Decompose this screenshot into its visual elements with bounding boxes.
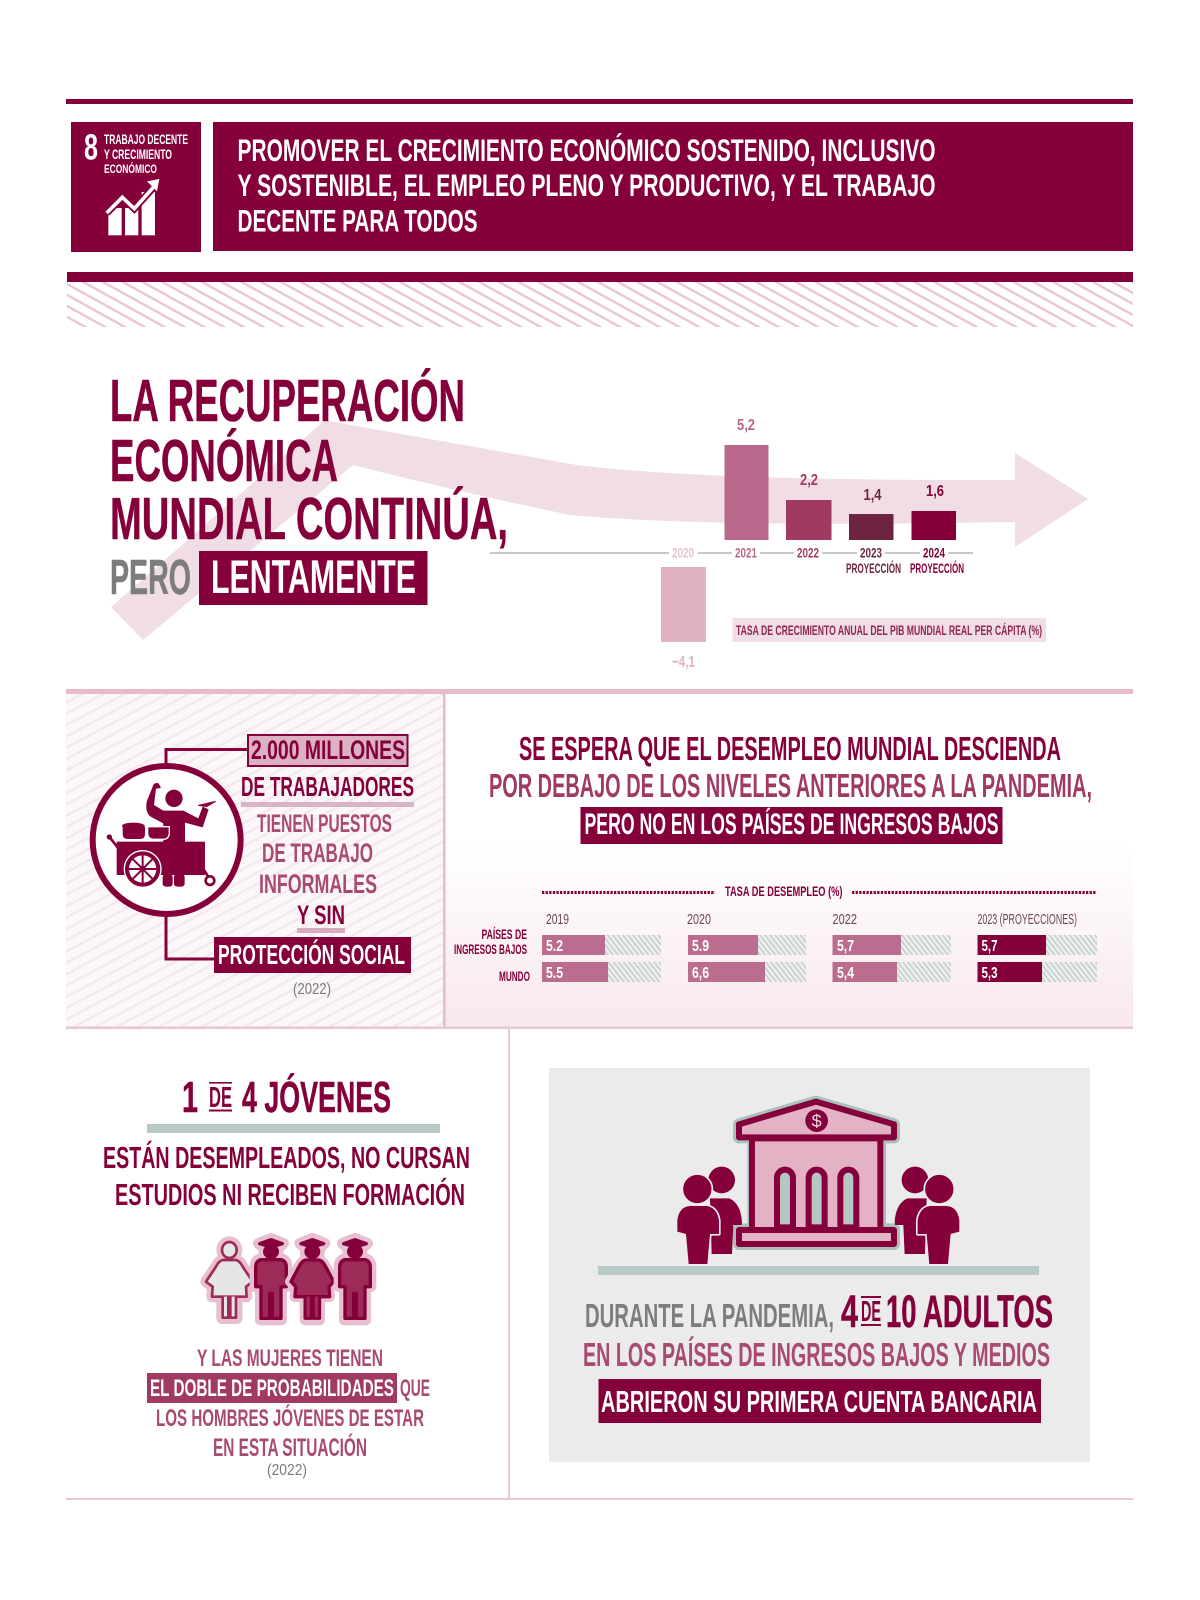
bar group 2023 projections: 5,7 [982, 938, 998, 955]
text: informal jobs: INFORMALES [259, 869, 377, 899]
badge number: 8 [84, 126, 98, 168]
chart caption [732, 618, 1046, 642]
SDG 8 badge [71, 122, 201, 252]
row labels: PAÍSES DE [482, 926, 527, 942]
bar group 2019: 5.2 [546, 938, 563, 955]
stat: 4 de 10 adultos: DURANTE LA PANDEMIA, [585, 1297, 834, 1334]
year note: (2022) [293, 981, 331, 998]
bar 2020: 2020 [672, 546, 694, 560]
bar 2023 [846, 487, 901, 576]
text: informal jobs: DE TRABAJO [262, 838, 373, 868]
text: y sin [297, 900, 345, 933]
bar 2024: 2024 [923, 546, 945, 560]
section rule [66, 689, 1133, 694]
stat: 4 de 10 adultos: DE [861, 1296, 881, 1328]
bar 2022 [786, 472, 832, 560]
bar group 2020: 5.9 [692, 938, 709, 955]
icon: dollar coin: $ [812, 1111, 822, 1131]
bar group 2023 projections [978, 911, 1097, 982]
section rule [66, 1026, 1133, 1029]
goal statement [238, 132, 936, 238]
highlight: el doble de probabilidades: EL DOBLE DE PROBABILIDADES [150, 1375, 394, 1402]
main heading [110, 368, 508, 605]
bar 2020 [661, 546, 706, 671]
highlight: low-income countries [580, 807, 1002, 844]
bar group 2022: 5,4 [837, 965, 854, 982]
bar group 2019 [542, 911, 661, 982]
row labels [454, 926, 530, 984]
goal banner [213, 122, 1133, 251]
figure: man [339, 1238, 371, 1320]
highlight: primera cuenta bancaria [598, 1379, 1041, 1423]
bar group 2022 [832, 911, 951, 982]
chart caption: TASA DE CRECIMIENTO ANUAL DEL PIB MUNDIAL REAL PER CÁPITA (%) [736, 623, 1042, 638]
main heading: MUNDIAL CONTINÚA, [110, 486, 508, 552]
divider bar [147, 1124, 440, 1133]
badge title: TRABAJO DECENTE [104, 131, 188, 147]
top rule [66, 99, 1133, 104]
bar 2023: 1,4 [864, 487, 882, 504]
text: women more likely: QUE [400, 1375, 430, 1402]
bar 2021: 5,2 [737, 417, 755, 434]
bar group 2023 projections: 2023 (PROYECCIONES) [978, 911, 1077, 928]
icon: four young people [206, 1238, 371, 1320]
arrow: recovery trend [111, 420, 1088, 640]
bar 2022: 2,2 [800, 472, 818, 489]
text: women more likely: Y LAS MUJERES TIENEN [197, 1345, 383, 1372]
panel: informal workers [66, 694, 446, 1027]
text: women more likely [147, 1345, 430, 1462]
stat: 1 de 4 jóvenes: 4 JÓVENES [242, 1072, 391, 1122]
bar 2024: PROYECCIÓN [910, 561, 964, 576]
text: unemployed [103, 1140, 470, 1212]
icon: bank with people [677, 1102, 959, 1264]
highlight: lentamente [199, 550, 428, 605]
icon: dollar coin [805, 1109, 828, 1132]
bar group 2020: 2020 [687, 911, 711, 928]
icon: street vendor in circle [93, 766, 241, 914]
stat: 1 de 4 jóvenes: DE [209, 1082, 232, 1114]
text: y sin: Y SIN [297, 900, 345, 930]
text: informal jobs [257, 810, 392, 899]
stat: 4 de 10 adultos: 4 [841, 1286, 858, 1337]
bar 2021: 2021 [735, 546, 757, 560]
text: de trabajadores: DE TRABAJADORES [241, 771, 414, 802]
highlight: el doble de probabilidades [147, 1373, 397, 1403]
highlight: lentamente: LENTAMENTE [211, 550, 416, 603]
people right [895, 1167, 959, 1264]
stat: 1 de 4 jóvenes: 1 [182, 1073, 198, 1122]
panel: unemployment [446, 694, 1133, 1027]
bar 2020: −4,1 [672, 654, 695, 671]
bar 2023: 2023 [860, 546, 882, 560]
bar 2024: 1,6 [926, 483, 944, 500]
bar 2021 [724, 417, 768, 560]
bar group 2020 [687, 911, 806, 982]
main heading: LA RECUPERACIÓN [110, 368, 465, 434]
badge title: Y CRECIMIENTO [104, 146, 172, 162]
panel: first bank account [549, 1068, 1090, 1462]
row labels: INGRESOS BAJOS [454, 941, 527, 957]
badge title [104, 131, 188, 176]
chart title: TASA DE DESEMPLEO (%) [725, 883, 842, 899]
main heading: PERO [110, 551, 191, 605]
bar group 2020: 6,6 [692, 965, 709, 982]
text: unemployed: ESTÁN DESEMPLEADOS, NO CURSAN [103, 1140, 470, 1175]
goal statement: DECENTE PARA TODOS [238, 202, 478, 238]
bar group 2019: 2019 [546, 911, 569, 928]
people left [677, 1167, 742, 1264]
bar 2024 [910, 483, 964, 576]
stat: 4 de 10 adultos [585, 1286, 1053, 1337]
text: unemployed: ESTUDIOS NI RECIBEN FORMACIÓN [115, 1176, 465, 1212]
stat: 2.000 millones: 2.000 MILLONES [251, 735, 405, 765]
bar group 2022: 2022 [832, 911, 857, 928]
text: de trabajadores [241, 771, 414, 807]
figure: woman [290, 1238, 334, 1320]
text: informal jobs: TIENEN PUESTOS [257, 810, 392, 838]
bar 2022: 2022 [797, 546, 819, 560]
panel heading [489, 730, 1092, 844]
stat: 1 de 4 jóvenes [182, 1072, 391, 1122]
badge title: ECONÓMICO [104, 161, 157, 176]
panel: youth unemployment [103, 1072, 470, 1479]
row labels: MUNDO [499, 968, 530, 984]
stat: 4 de 10 adultos: 10 ADULTOS [886, 1286, 1053, 1337]
text: women more likely: LOS HOMBRES JÓVENES DE ESTAR [156, 1404, 424, 1432]
bar chart: GDP growth [490, 417, 1046, 671]
header band with hatching [67, 272, 1133, 327]
bar group 2022: 5,7 [837, 938, 854, 955]
bar group 2023 projections: 5,3 [982, 965, 998, 982]
bar group 2019: 5.5 [546, 965, 563, 982]
divider bar [598, 1266, 1039, 1275]
highlight: protección social [214, 937, 411, 973]
text: women more likely: EN ESTA SITUACIÓN [213, 1432, 367, 1462]
figure: woman highlighted [206, 1242, 253, 1318]
icon: growth chart with arrow [107, 179, 159, 235]
highlight: protección social: PROTECCIÓN SOCIAL [218, 939, 405, 970]
connector lines [166, 750, 248, 959]
figure: man [255, 1238, 287, 1320]
year note: (2022) [267, 1462, 307, 1479]
bar 2023: PROYECCIÓN [846, 561, 901, 576]
main heading: ECONÓMICA [110, 428, 338, 494]
